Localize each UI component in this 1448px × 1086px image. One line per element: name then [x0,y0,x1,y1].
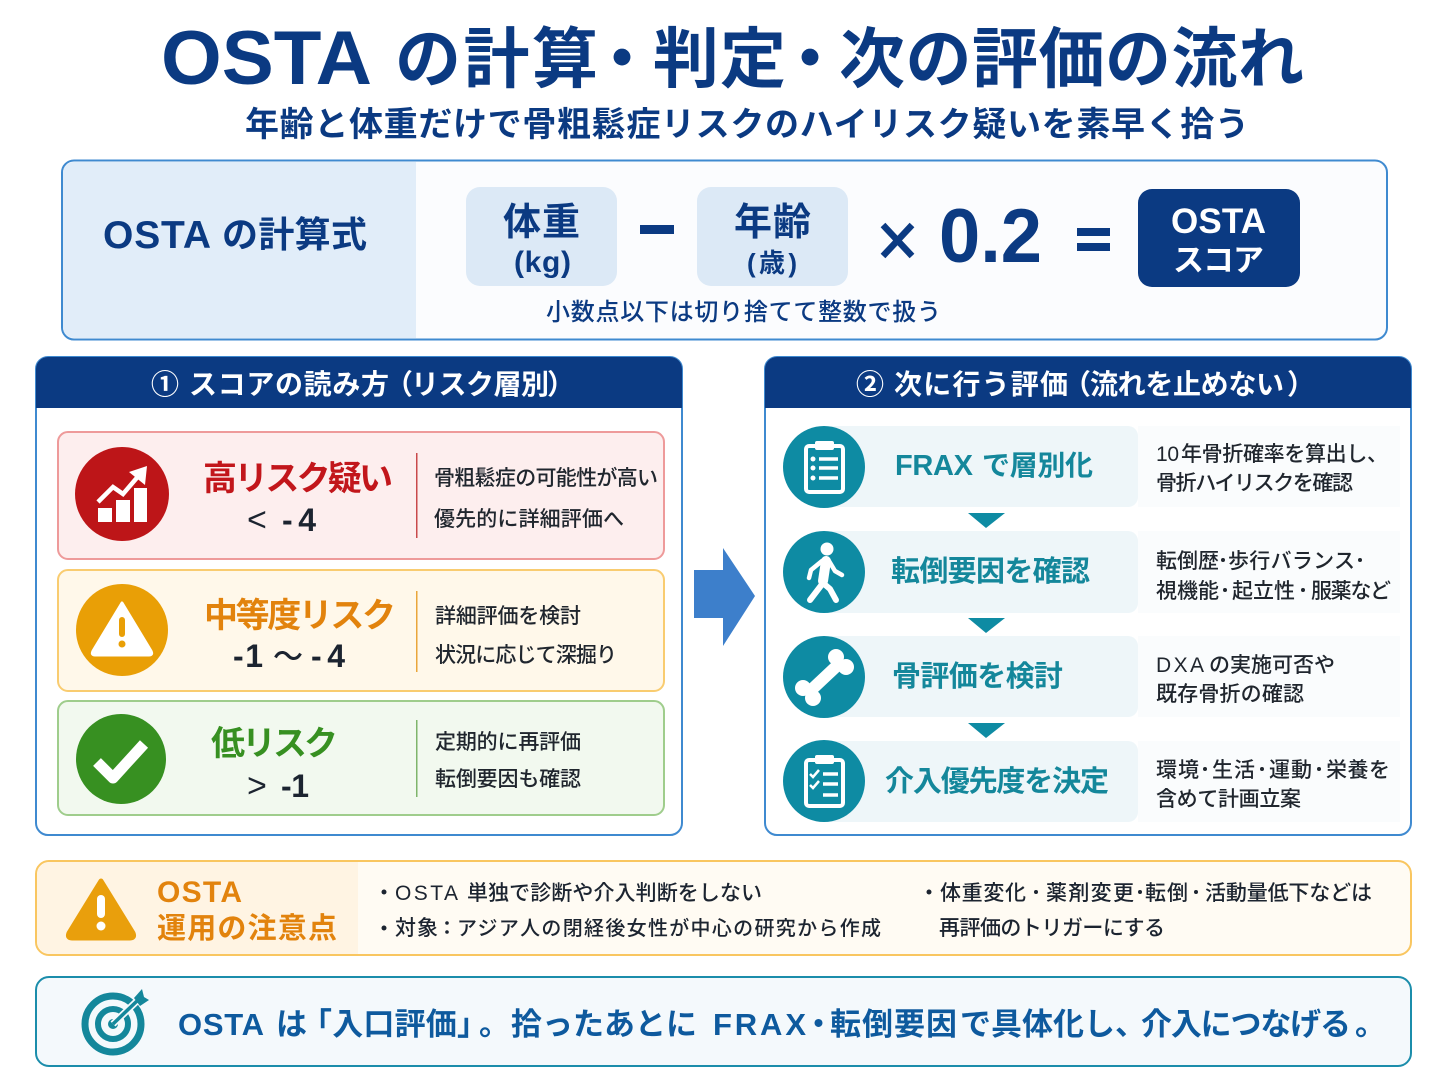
caution list: right: 活動量低下などは [1205,882,1372,905]
card: medium risk: 状況に応じて深掘り [435,644,617,667]
caution list: right: 再評価のトリガーにする [939,917,1165,940]
key message text: ・ [803,1007,834,1042]
medium risk threshold: ～ [273,641,303,674]
multiply by 0.2: 0.2 [939,194,1042,279]
caution heading: 運用の注意点 [157,912,337,945]
card: low risk: 低リスク [211,725,338,763]
step detail: priority: 生活 [1212,759,1255,782]
card: low risk: 転倒要因も確認 [435,768,581,791]
high risk threshold: < [247,501,267,539]
medium risk threshold: -1 [233,638,263,674]
step: falls: 転倒要因を確認 [891,555,1090,588]
caution list: right: 体重変化 [940,882,1026,905]
card: high risk [58,432,664,559]
step title: FRAX: で層別化 [982,450,1093,481]
caution list: left: 単独で診断や介入判断をしない [467,882,762,905]
arrow: step 3 to 4 [968,723,1005,738]
formula label: OSTA [103,214,211,257]
key message text: 介入につなげる [1141,1007,1351,1042]
step detail: falls: 服薬など [1311,580,1391,603]
high risk threshold [247,501,316,539]
key message text: で具体化し、 [960,1007,1146,1042]
minus sign [640,225,674,234]
key message text: OSTA [178,1007,264,1042]
step detail: FRAX: 骨折ハイリスクを確認 [1156,472,1353,495]
arrow: step 1 to 2 [968,513,1005,528]
panel header [765,357,1411,408]
medium risk threshold [233,638,345,674]
key message text: 。 [479,1007,510,1042]
caution list: left: アジア人の閉経後女性が中心の研究から作成 [457,917,881,940]
card: medium risk: 詳細評価を検討 [435,605,581,628]
icon: walking person [783,531,865,613]
step detail: bone: 既存骨折の確認 [1156,683,1304,706]
formula term: age: (歳) [747,248,797,278]
step detail: FRAX: 10 [1156,443,1179,466]
step detail: priority [1156,759,1390,811]
formula term: weight: 体重 [503,202,580,244]
panel header: スコアの読み方 [189,369,389,400]
step: FRAX [783,426,1400,508]
step detail: priority: 含めて計画立案 [1156,788,1301,811]
caution heading [157,876,337,945]
panel: formula [62,160,1387,340]
OSTA score box: スコア [1173,243,1264,278]
title: の計算 [395,22,598,96]
step detail: priority: 運動 [1269,759,1312,782]
card: low risk: 定期的に再評価 [435,731,581,754]
step detail: falls: 視機能 [1156,580,1219,603]
step: priority [783,740,1400,822]
step detail: falls: 転倒歴 [1156,550,1219,573]
icon: bone [783,636,865,718]
step detail: bone: の実施可否や [1209,654,1335,677]
icon: rising chart [75,447,169,541]
step title: FRAX: FRAX [895,450,974,482]
formula term: weight [466,187,617,286]
card: medium risk: 中等度リスク [204,597,396,635]
step: bone: 骨評価を検討 [892,660,1063,693]
formula label [103,214,367,257]
subtitle: 年齢と体重だけで骨粗鬆症リスクのハイリスク疑いを素早く拾う [245,106,1249,144]
key message text: FRAX [713,1007,806,1042]
OSTA score box [1138,189,1300,287]
formula term: weight: (kg) [514,246,571,279]
key message text: 。 [1355,1007,1386,1042]
title: 判定 [653,22,786,96]
card: medium risk [58,570,664,691]
medium risk threshold: -4 [311,638,345,674]
title: ・ [777,22,843,96]
step detail: FRAX [1156,443,1388,495]
title: ・ [589,22,655,96]
panel header: ） [1287,369,1315,400]
panel: score reading [36,357,682,835]
formula note: 小数点以下は切り捨てて整数で扱う [546,299,941,326]
step detail: falls: 起立性 [1232,580,1295,603]
low risk threshold: -1 [281,768,309,804]
card: high risk: 優先的に詳細評価へ [434,508,624,531]
icon: warning triangle [68,881,134,938]
arrow: to next assessment [694,548,755,646]
step title: FRAX [895,450,1093,482]
panel header [36,357,682,408]
icon: warning [76,584,168,676]
key message text [178,1007,1386,1042]
caution list: right [926,882,1372,940]
multiply by 0.2 [883,194,1042,279]
card: high risk: 骨粗鬆症の可能性が高い [434,467,658,490]
arrow: step 2 to 3 [968,618,1005,633]
panel header: ① [151,369,179,400]
caution list: left: 対象 [395,917,438,940]
caution list: right: 薬剤変更 [1046,882,1134,905]
formula term: age: 年齢 [734,202,811,244]
panel header: ② [856,369,884,400]
panel header: 次に行う評価 [894,369,1068,400]
card: low risk [58,701,664,815]
key message text: 転倒要因 [830,1007,957,1042]
icon: clipboard list [783,426,865,508]
icon: clipboard check [783,740,865,822]
step: bone [783,636,1400,718]
step detail: falls: 歩行バランス [1228,550,1355,573]
panel header: ） [547,369,575,400]
formula term: age [697,187,848,286]
panel header: （ [385,369,413,400]
step: falls [783,531,1400,613]
low risk threshold: > [247,767,267,805]
step detail: falls [1156,550,1391,603]
OSTA score box: OSTA [1171,202,1266,241]
step: priority: 介入優先度を決定 [885,765,1109,798]
panel header: （ [1063,369,1091,400]
icon: target [85,989,149,1052]
step detail: bone [1156,654,1335,706]
high risk threshold: -4 [282,502,316,538]
equals sign [1077,228,1110,251]
step detail: FRAX: 年骨折確率を算出し、 [1181,443,1388,466]
key message text: 「入口評価」 [301,1007,488,1042]
caution list: right: 転倒 [1145,882,1188,905]
step detail: priority: 栄養を [1326,759,1390,782]
step detail: priority: 環境 [1156,759,1199,782]
panel: cautions [36,861,1411,955]
formula label: の計算式 [222,214,367,255]
panel header: 流れを止めない [1090,369,1284,400]
title: OSTA [161,16,372,101]
panel header: リスク層別 [411,369,549,400]
icon: check [76,714,166,804]
key message text: は [276,1007,307,1042]
panel: key message [36,977,1411,1066]
caution list: left [382,882,881,940]
step detail: bone: DXA [1156,654,1204,677]
key message text: 拾ったあとに [511,1007,697,1042]
caution heading: OSTA [157,876,242,909]
low risk threshold [247,767,309,805]
caution list: left: OSTA [395,882,458,905]
title: 次の評価の流れ [839,22,1304,96]
panel: next assessment [765,357,1411,835]
card: high risk: 高リスク疑い [203,460,393,498]
title [161,16,1304,101]
